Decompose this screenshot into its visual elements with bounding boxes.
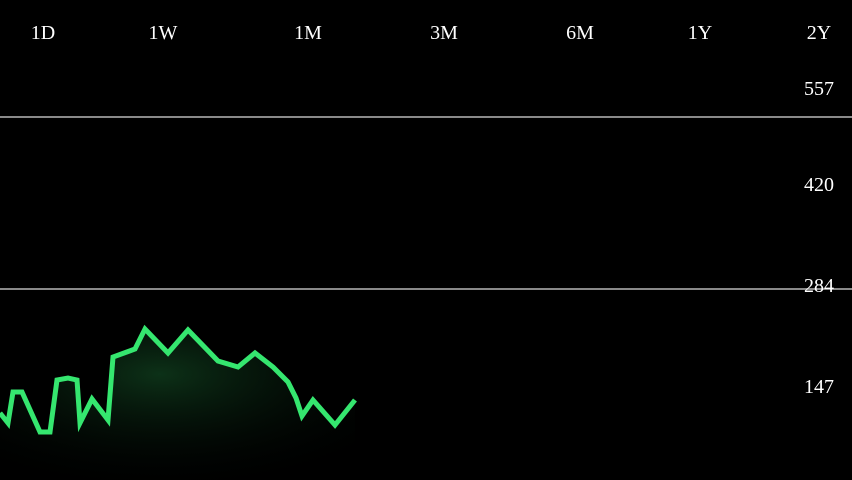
time range tabs: 1W (149, 22, 178, 44)
y-axis labels: 147 (804, 376, 834, 398)
time range tabs: 6M (566, 22, 594, 44)
y-axis labels: 557 (804, 78, 834, 100)
time range tabs (31, 22, 831, 44)
time range tabs: 1Y (688, 22, 712, 44)
y-axis labels (804, 78, 834, 398)
y-axis labels: 420 (804, 174, 834, 196)
time range tabs: 1D (31, 22, 55, 44)
price line (0, 329, 355, 432)
time range tabs: 3M (430, 22, 458, 44)
time range tabs: 2Y (807, 22, 831, 44)
time range tabs: 1M (294, 22, 322, 44)
area fill (0, 329, 355, 480)
y-axis labels: 284 (804, 275, 834, 297)
